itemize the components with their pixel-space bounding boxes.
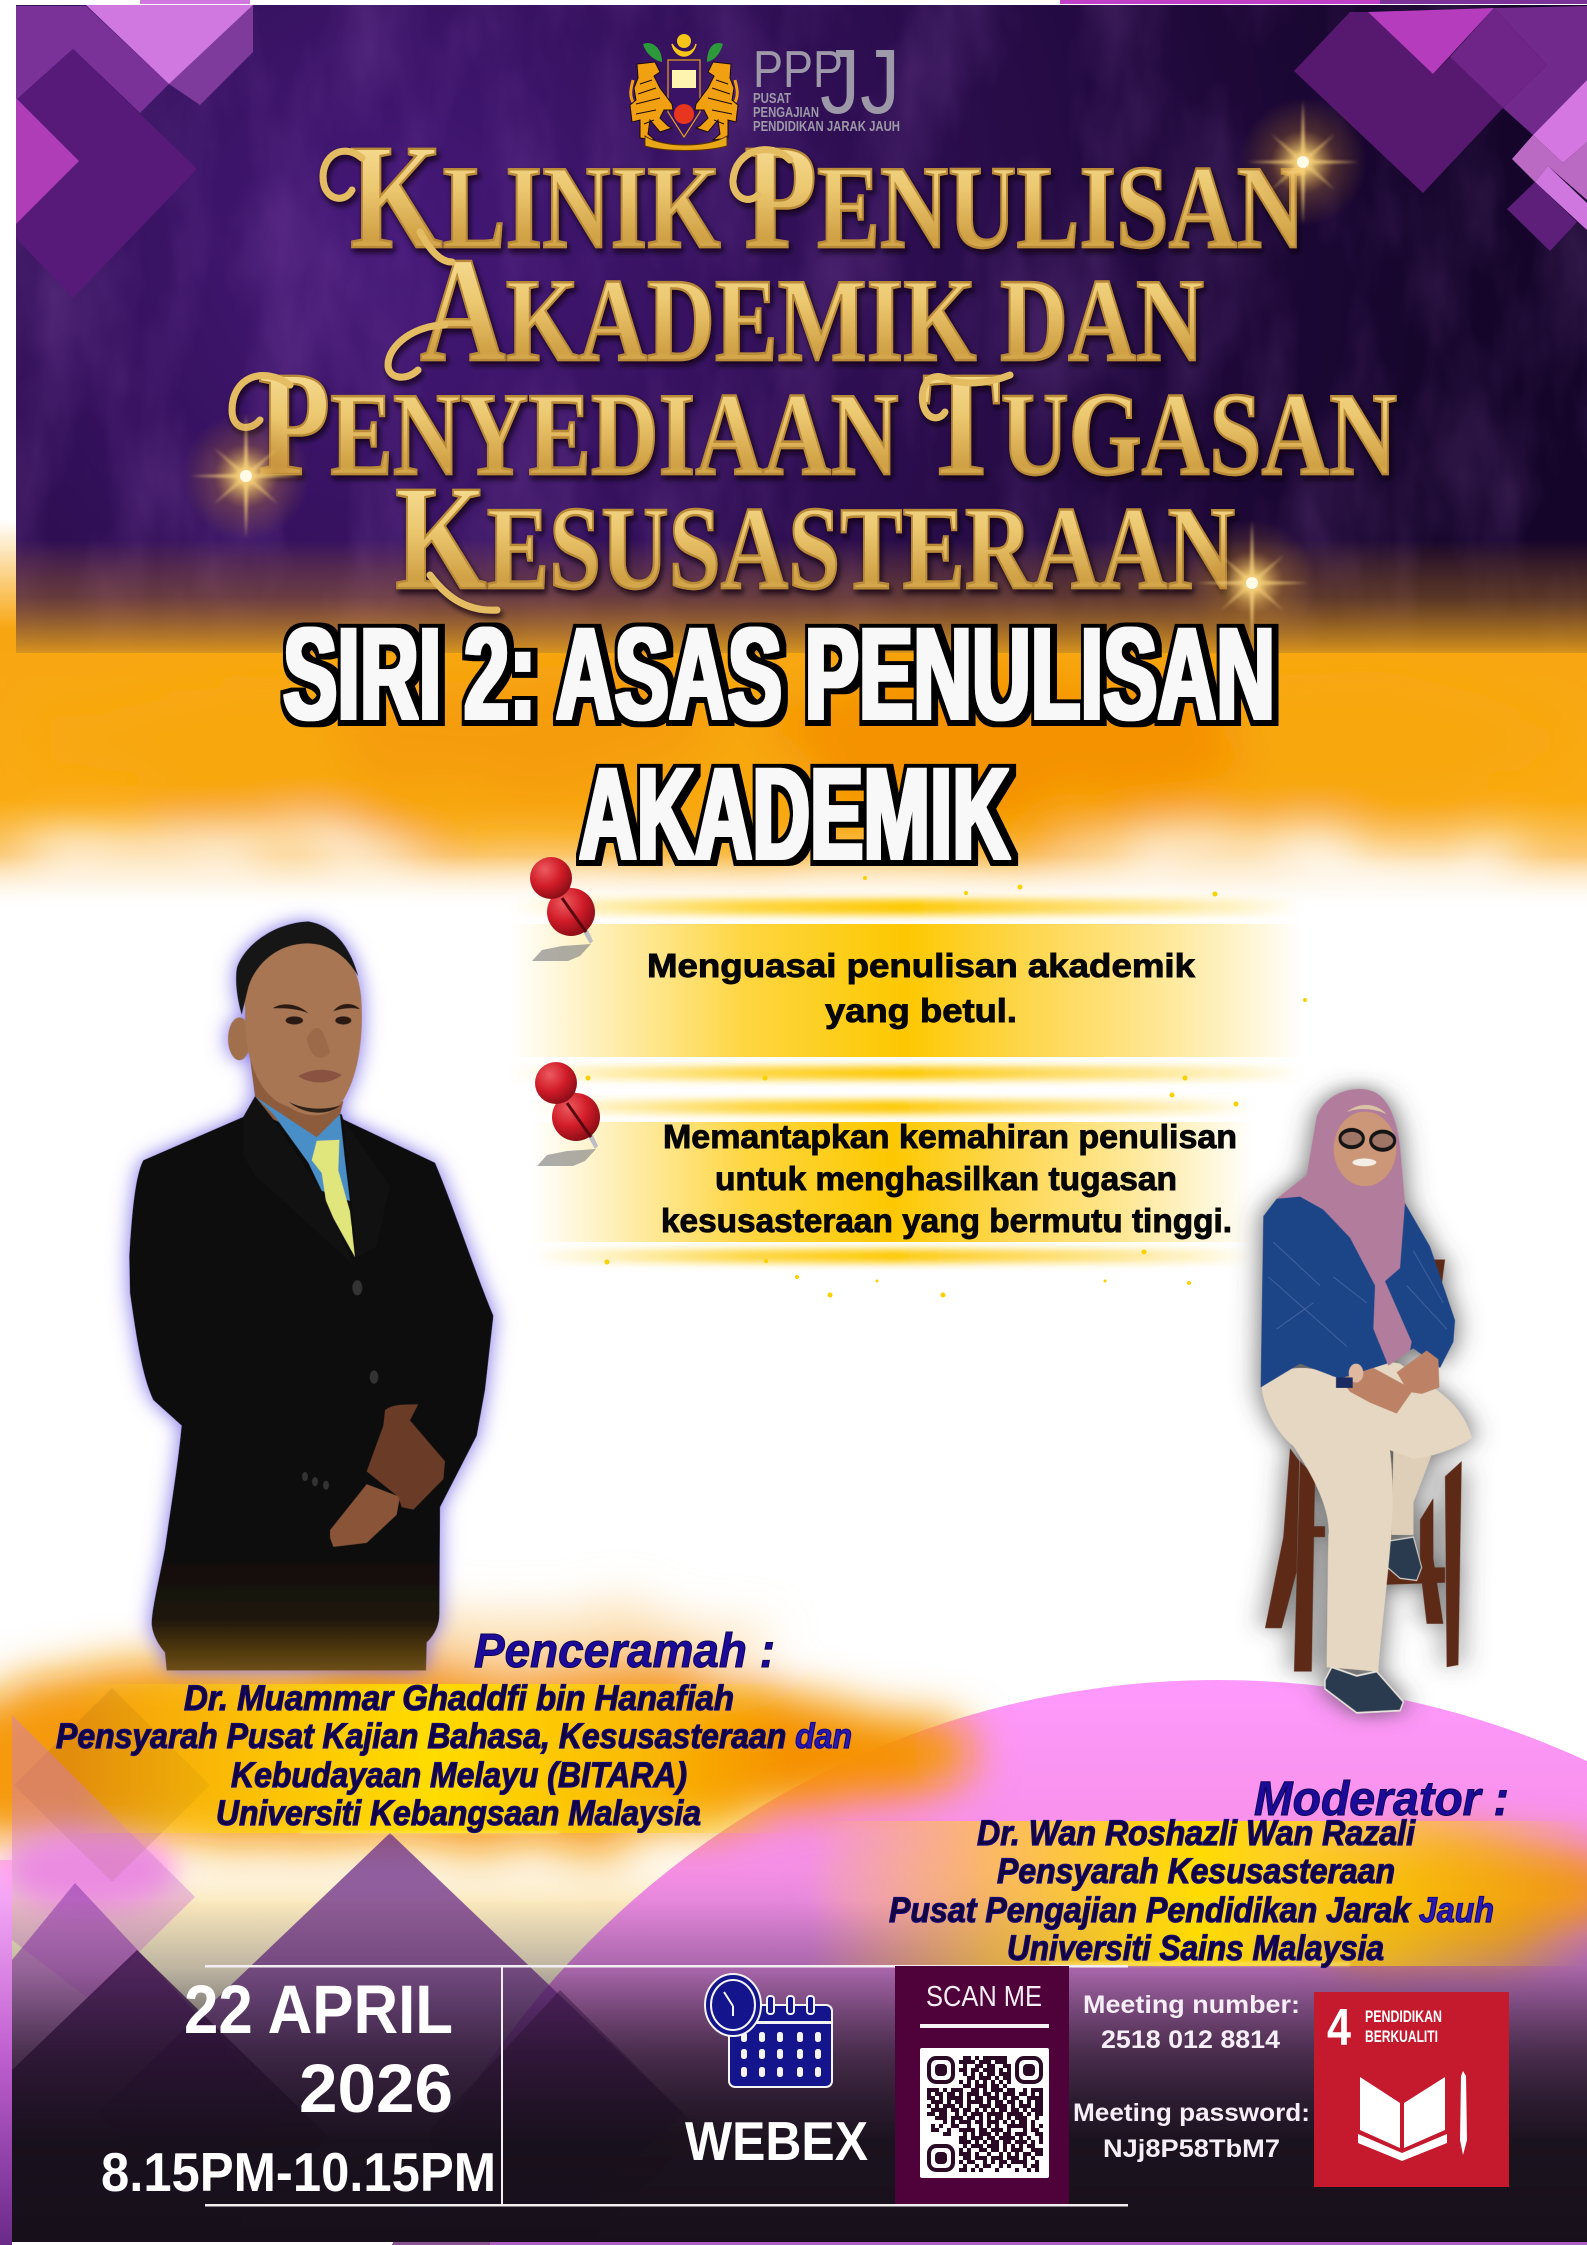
banner gold haze [16, 540, 1587, 653]
objective text 2: untuk menghasilkan tugasan [715, 1160, 1177, 1197]
left edge strip [0, 1860, 12, 2245]
date and time: 2026 [299, 2050, 453, 2127]
lower base gradient [12, 1830, 1587, 2242]
speaker details: Universiti Kebangsaan Malaysia [216, 1794, 701, 1833]
lower orange smoke [0, 1610, 1587, 1952]
heading: Penceramah: Penceramah : [474, 1625, 775, 1678]
blouse [1261, 1188, 1455, 1387]
shirt [255, 1096, 350, 1201]
speaker details: Pensyarah Pusat Kajian Bahasa, Kesusasteraan dan [56, 1717, 852, 1756]
moderator details: Dr. Wan Roshazli Wan Razali [977, 1814, 1416, 1853]
far leg [1392, 1450, 1433, 1535]
face [244, 936, 362, 1115]
trousers [1262, 1359, 1472, 1672]
title: Klinik Penulisan Akademik dan Penyediaan Tugasan Kesusasteraan: PENYEDIAAN TUGASAN [258, 341, 1397, 507]
meeting details [1073, 1991, 1310, 2163]
speaker details: Dr. Muammar Ghaddfi bin Hanafiah [184, 1679, 734, 1718]
pink arc [392, 1680, 1587, 2245]
glasses [1340, 1130, 1395, 1150]
moderator details: Pusat Pengajian Pendidikan Jarak Jauh [889, 1891, 1494, 1930]
objective text 2: Memantapkan kemahiran penulisan [663, 1118, 1237, 1155]
stool [1265, 1260, 1462, 1672]
title: Klinik Penulisan Akademik dan Penyediaan Tugasan Kesusasteraan: AKADEMIK DAN [420, 227, 1204, 393]
subtitle: Siri 2 Asas Penulisan Akademik: AKADEMIK [579, 740, 1010, 887]
objective text 1 [647, 947, 1196, 1029]
logo: PPPJJ wordmark: PENGAJIAN [753, 104, 819, 121]
objective text 2: kesusasteraan yang bermutu tinggi. [661, 1202, 1232, 1239]
SDG 4 badge: PENDIDIKAN [1365, 2007, 1442, 2026]
jacket buttons [302, 1280, 378, 1490]
pin 2 [535, 1062, 600, 1166]
hands [1340, 1351, 1439, 1413]
moderator details [889, 1814, 1494, 1968]
meeting details: Meeting number: [1083, 1991, 1300, 2019]
top banner [16, 5, 1587, 653]
subtitle: Siri 2 Asas Penulisan Akademik [283, 600, 1275, 887]
pin 1 [530, 857, 595, 961]
crest left tiger [630, 62, 673, 140]
smile [1352, 1158, 1376, 1166]
bottom purple edge [490, 2242, 1587, 2245]
speaker band [70, 1684, 790, 1834]
logo: PPPJJ wordmark: PUSAT [753, 90, 791, 107]
date and time: 22 APRIL [184, 1971, 453, 2048]
tie [312, 1140, 355, 1257]
icon: calendar with clock [705, 1974, 832, 2087]
hair [236, 921, 358, 1015]
jacket lapels [243, 1096, 353, 1265]
shoe left [1325, 1667, 1403, 1713]
moderator details: Universiti Sains Malaysia [1007, 1929, 1384, 1968]
logo: university crest [630, 34, 738, 150]
presenter portrait [129, 921, 493, 1670]
suit [129, 1096, 493, 1670]
meeting details: 2518 012 8814 [1101, 2026, 1280, 2054]
objective text 1: yang betul. [825, 992, 1017, 1029]
title: Klinik Penulisan Akademik dan Penyediaan Tugasan Kesusasteraan: KESUSASTERAAN [395, 455, 1235, 621]
objective text 1: Menguasai penulisan akademik [647, 947, 1196, 984]
shoe right [1385, 1537, 1422, 1580]
label: scan me: SCAN ME [926, 1981, 1042, 2013]
face [1334, 1112, 1396, 1186]
speaker details: Kebudayaan Melayu (BITARA) [231, 1756, 687, 1795]
date and time [101, 1971, 496, 2203]
title: Klinik Penulisan Akademik dan Penyediaan Tugasan Kesusasteraan: KLINIK PENULISAN [350, 114, 1305, 280]
SDG 4 badge [1314, 1992, 1509, 2187]
logo: PPPJJ wordmark [753, 31, 900, 135]
title letter swashes [232, 150, 1010, 610]
objective panel 1 [510, 899, 1302, 1080]
facial features [273, 1004, 360, 1113]
SDG 4 badge: 4 [1327, 1999, 1351, 2057]
scattered gold specks [586, 876, 1307, 1298]
icon: open book [1358, 2077, 1447, 2161]
logo: PPPJJ wordmark: JJ [820, 31, 900, 133]
crest shield [668, 60, 700, 137]
sparkle left of Tugasan line [182, 412, 310, 540]
icon: pencil [1460, 2071, 1467, 2155]
date and time: 8.15PM-10.15PM [101, 2141, 496, 2203]
top edge line [140, 0, 1587, 4]
lower decorative diamonds [12, 1688, 700, 2242]
neck [250, 1058, 343, 1140]
blouse check lines [1268, 1242, 1447, 1346]
moderator portrait [1261, 1089, 1472, 1713]
ear [228, 1017, 251, 1060]
decorative diamonds top right [1294, 6, 1587, 251]
sparkle right of Penulisan [1239, 98, 1367, 226]
SDG 4 badge: BERKUALITI [1365, 2027, 1438, 2046]
hands [330, 1404, 445, 1547]
sparkle after Kesusasteraan [1188, 519, 1316, 647]
top orange smoke band [0, 520, 1587, 910]
logo: PPPJJ wordmark: PENDIDIKAN JARAK JAUH [753, 118, 900, 135]
info frame lines [205, 1965, 1128, 2206]
heading: Moderator: Moderator : [1254, 1773, 1509, 1826]
crest palms [643, 43, 723, 62]
moderator details: Pensyarah Kesusasteraan [997, 1852, 1395, 1891]
decorative diamonds top left [16, 5, 253, 298]
moderator band [810, 1821, 1587, 1966]
meeting details: Meeting password: [1073, 2099, 1310, 2127]
objective text 2 [661, 1118, 1237, 1239]
crest right tiger [695, 62, 738, 140]
objective panel 2 [532, 1100, 1253, 1263]
QR code [927, 2058, 1043, 2170]
crest ribbon [645, 136, 727, 150]
title: Klinik Penulisan Akademik dan Penyediaan Tugasan Kesusasteraan [232, 114, 1397, 621]
logo: PPPJJ wordmark: PPP [753, 41, 843, 99]
crest sun and moon [672, 34, 696, 56]
speaker details [56, 1679, 852, 1833]
watch [1336, 1364, 1363, 1388]
meeting details: NJj8P58TbM7 [1103, 2135, 1280, 2163]
scarf [1277, 1089, 1412, 1366]
label: WEBEX: WEBEX [685, 2110, 868, 2172]
bottom dark fade [12, 1900, 1587, 2242]
QR panel [895, 1966, 1069, 2204]
